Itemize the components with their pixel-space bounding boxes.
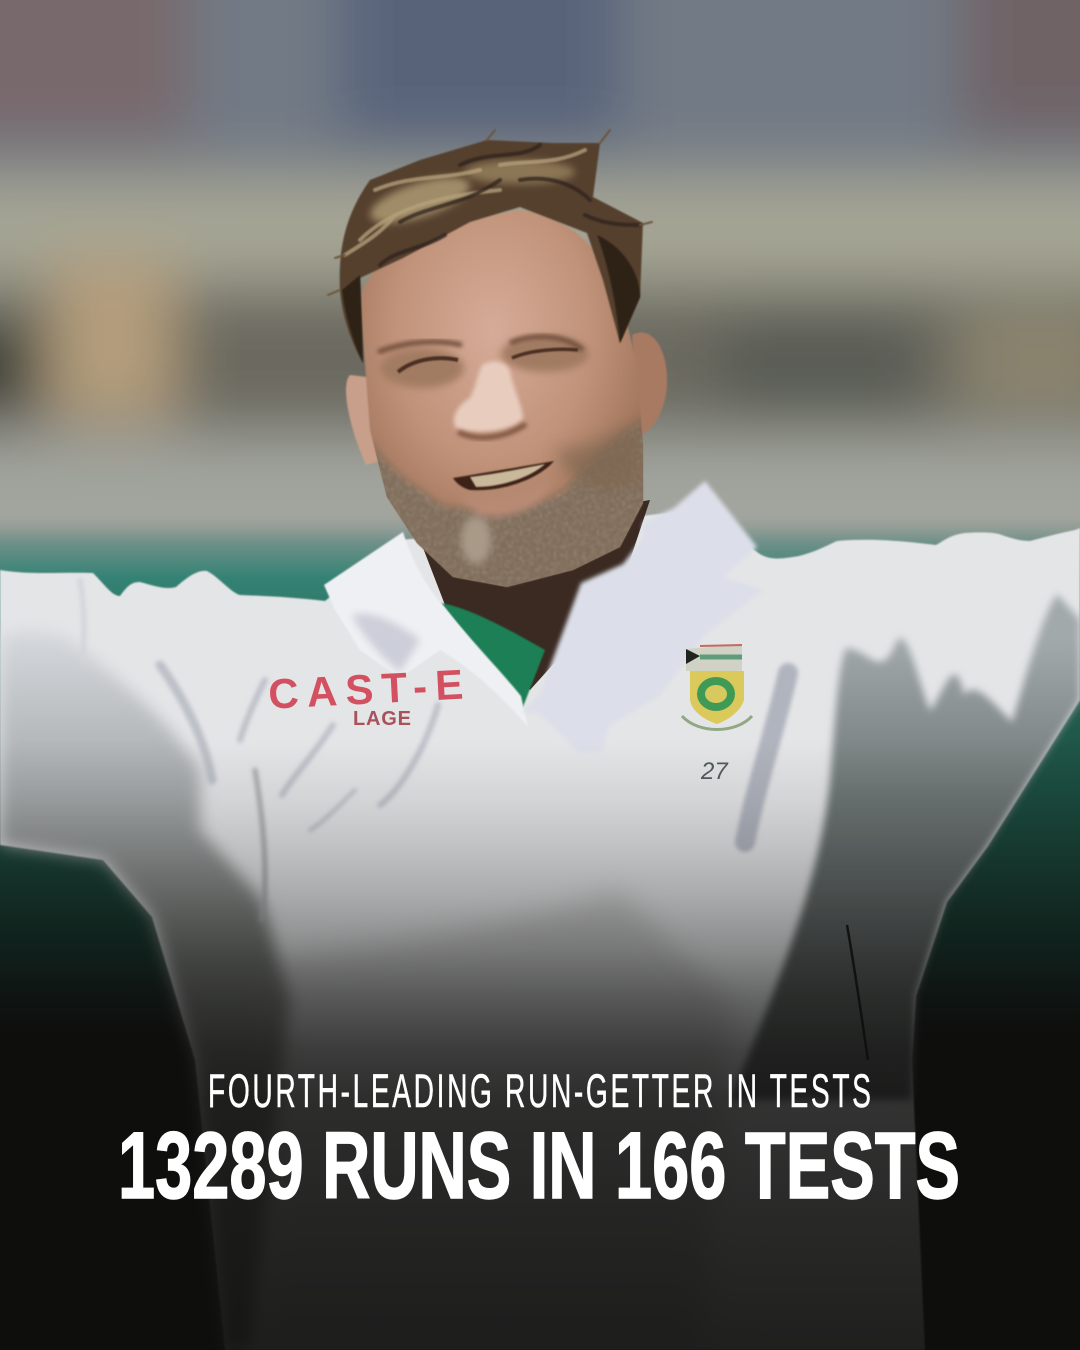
hair strands [328, 130, 652, 295]
chin patch [461, 516, 491, 564]
hair dark side [342, 235, 640, 363]
collar [324, 481, 764, 752]
sponsor logo: Castle Lager: LAGE [353, 708, 411, 730]
green undershirt placket [441, 603, 545, 712]
nose [454, 361, 523, 432]
neck [420, 500, 650, 690]
face [360, 210, 643, 587]
beard [373, 418, 643, 587]
hair [340, 140, 643, 363]
flag [686, 644, 742, 671]
mouth [453, 461, 554, 490]
shirt fold shadows [80, 580, 788, 920]
face details clipped to the head [373, 416, 643, 587]
eyes [398, 358, 458, 372]
beard stubble [379, 426, 643, 586]
crest: South Africa cricket badge [682, 644, 752, 785]
left arm shadow [0, 630, 290, 1350]
left collar [324, 532, 528, 727]
sponsor logo: Castle Lager: CAST-E [267, 661, 464, 718]
scroll [682, 716, 752, 730]
head [328, 130, 667, 600]
nostril shadow [458, 424, 526, 438]
right arm shadow [730, 594, 1080, 1100]
hair highlights [365, 168, 475, 232]
lower chest shadow [260, 890, 730, 1350]
eyebrows [378, 342, 462, 352]
ears [346, 375, 384, 465]
shield [690, 671, 744, 724]
shirt and outstretched arms [0, 510, 1080, 1350]
teeth [470, 464, 545, 487]
shirt number: 27 [700, 758, 729, 785]
subheading: FOURTH-LEADING RUN-GETTER IN TESTS [208, 1066, 871, 1118]
cheek stubble [556, 420, 640, 490]
dark bottom gradient overlay [0, 740, 1080, 1350]
left collar shadow [352, 614, 420, 672]
caption text [118, 1066, 960, 1219]
side seam [847, 925, 868, 1060]
right collar [522, 481, 764, 752]
eye sockets [380, 348, 464, 388]
lower lip and chin skin [468, 490, 544, 520]
